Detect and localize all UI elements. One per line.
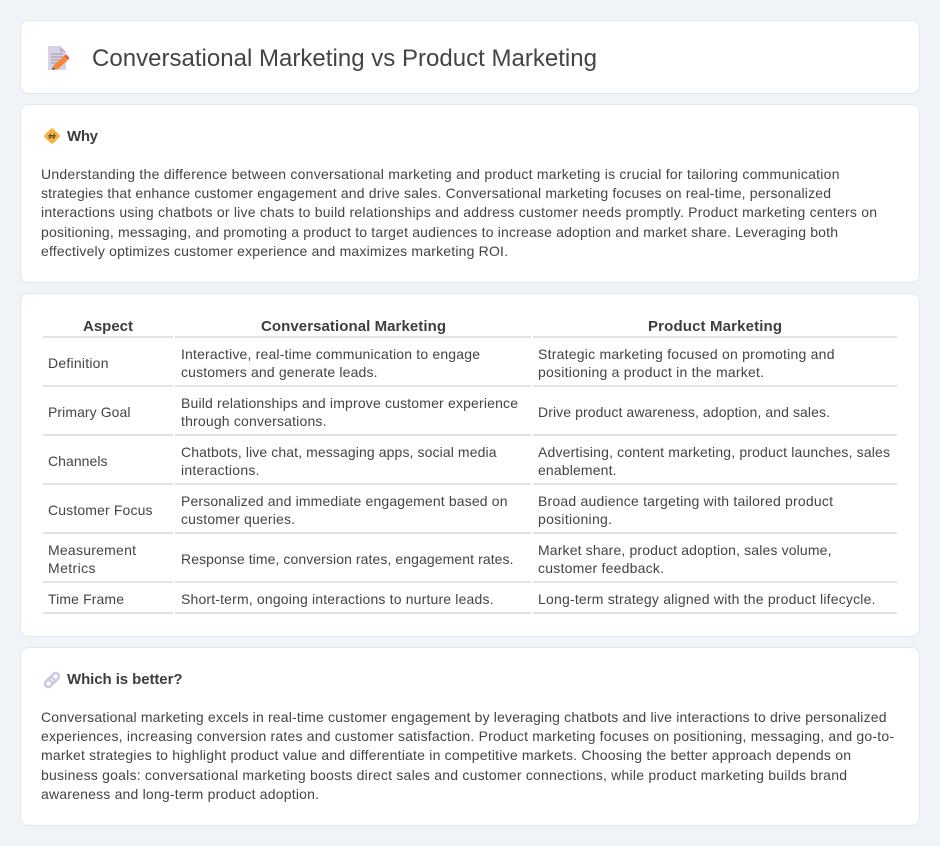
icon: diamond sign	[44, 128, 60, 144]
table row: measurement metrics: Response time, conversion rates, engagement rates.	[181, 551, 514, 567]
text block: which is better: experiences, increasing conversion rates and customer satisfaction. Product marketing focuses on positioning, messaging, and go-to-	[41, 728, 894, 744]
panel: comparison table	[20, 294, 920, 636]
text block: which is better	[41, 709, 894, 802]
table row: customer focus: Personalized and immediate engagement based on	[181, 493, 508, 509]
table row: definition: customers and generate leads.	[181, 364, 378, 380]
text block: which is better: market strategies to highlight product value and differentiate in competitive markets. Choosing the better approach depends on	[41, 747, 851, 763]
panel: which is better	[20, 648, 920, 826]
table row: time frame: Time Frame	[48, 591, 124, 607]
table row: measurement metrics: customer feedback.	[538, 560, 664, 576]
text block: why: Understanding the difference between conversational marketing and product marketing is crucial for tailoring communication	[41, 166, 840, 182]
panel: why	[20, 104, 920, 282]
table header row: Conversational Marketing	[261, 318, 446, 335]
table row: channels: Chatbots, live chat, messaging apps, social media	[181, 444, 497, 460]
table row: measurement metrics: Metrics	[48, 560, 96, 576]
text block: which is better: Conversational marketing excels in real-time customer engagement by leveraging chatbots and live interactions to drive personalized	[41, 709, 886, 725]
heading: why: Why	[67, 128, 99, 145]
table row: primary goal: Drive product awareness, adoption, and sales.	[538, 404, 830, 420]
table row: definition	[48, 346, 834, 380]
table row: time frame	[48, 591, 876, 607]
table row: definition: positioning a product in the market.	[538, 364, 764, 380]
title: Conversational Marketing vs Product Marketing	[92, 45, 597, 72]
table row: channels: enablement.	[538, 462, 616, 478]
icon: link	[44, 672, 60, 688]
table row: measurement metrics	[48, 542, 832, 576]
table row: primary goal: Build relationships and improve customer experience	[181, 395, 518, 411]
table row: channels: Advertising, content marketing, product launches, sales	[538, 444, 890, 460]
table header row: Aspect	[83, 318, 133, 335]
table row: customer focus: Broad audience targeting with tailored product	[538, 493, 833, 509]
table row: time frame: Short-term, ongoing interactions to nurture leads.	[181, 591, 494, 607]
text block: why: positioning, messaging, and promoting a product to target audiences to increase adoption and market share. Leveraging both	[41, 224, 838, 240]
table row: customer focus: customer queries.	[181, 511, 295, 527]
table row: measurement metrics: Market share, product adoption, sales volume,	[538, 542, 832, 558]
table row: customer focus	[48, 493, 833, 527]
text block: why: effectively optimizes customer experience and maximizes marketing ROI.	[41, 243, 508, 259]
table row: definition: Definition	[48, 355, 108, 371]
table header row	[83, 318, 782, 335]
table row: primary goal	[48, 395, 830, 429]
table row: definition: Strategic marketing focused on promoting and	[538, 346, 834, 362]
text block: why: strategies that enhance customer engagement and drive sales. Conversational marketing focuses on real-time, personalized	[41, 185, 831, 201]
text block: why	[41, 166, 877, 259]
text block: which is better: business goals: conversational marketing boosts direct sales and customer connections, while product marketing builds brand	[41, 767, 847, 783]
table row: customer focus: Customer Focus	[48, 502, 152, 518]
panel: header	[20, 20, 920, 94]
table row: time frame: Long-term strategy aligned with the product lifecycle.	[538, 591, 876, 607]
text block: which is better: awareness and long-term product adoption.	[41, 786, 319, 802]
heading: which is better: Which is better?	[67, 671, 182, 688]
table row: channels	[48, 444, 890, 478]
text block: why: interactions using chatbots or live chats to build relationships and address customer needs promptly. Product marketing centers on	[41, 204, 877, 220]
table header row: Product Marketing	[648, 318, 782, 335]
table row: channels: interactions.	[181, 462, 260, 478]
table row: primary goal: Primary Goal	[48, 404, 130, 420]
table row: customer focus: positioning.	[538, 511, 612, 527]
table row: definition: Interactive, real-time communication to engage	[181, 346, 480, 362]
table row: channels: Channels	[48, 453, 108, 469]
table row: primary goal: through conversations.	[181, 413, 326, 429]
icon: document with pencil	[48, 46, 70, 70]
table row: measurement metrics: Measurement	[48, 542, 136, 558]
